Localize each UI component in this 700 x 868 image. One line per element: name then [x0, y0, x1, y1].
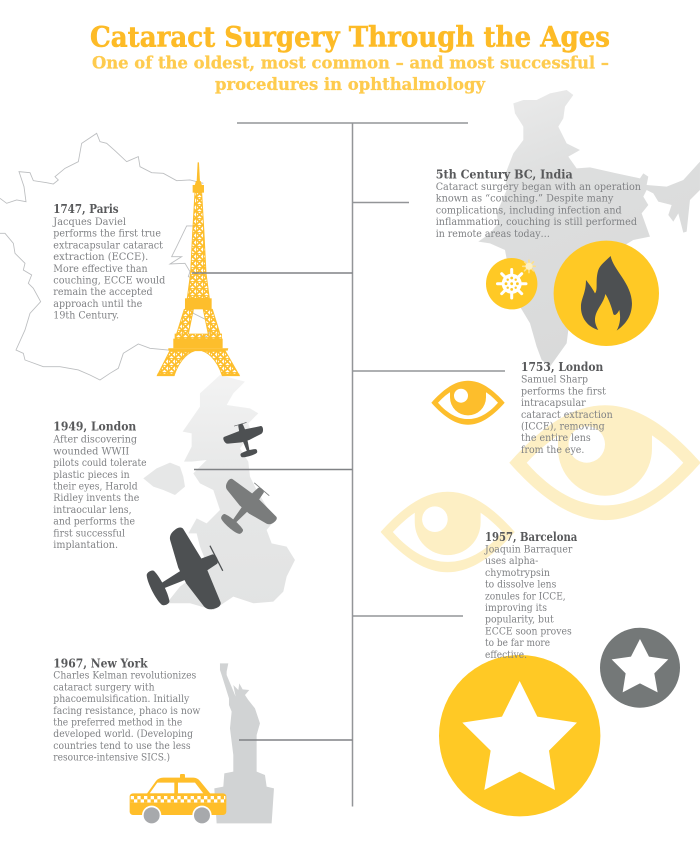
text: 1753, London: from the eye. — [521, 444, 584, 456]
text: 1753, London: intracapsular — [521, 397, 586, 409]
text: 5th Century BC, India: 5th Century BC, India — [436, 167, 573, 181]
text: 1957, Barcelona: popularity, but — [485, 614, 554, 626]
text: 1753, London: Samuel Sharp — [521, 374, 588, 386]
text: 1747, Paris: More effective than — [53, 263, 148, 275]
text: 1753, London: performs the first — [521, 385, 607, 397]
text: 1957, Barcelona: zonules for ICCE, — [485, 590, 566, 602]
text: 5th Century BC, India: inflammation, couching is still performed — [436, 216, 637, 228]
text: 1967, New York: 1967, New York — [53, 656, 148, 670]
text: 1949, London: their eyes, Harold — [53, 480, 138, 492]
icon: large circle with star — [439, 655, 600, 816]
text: 1949, London: plastic pieces in — [53, 469, 130, 481]
icon: medium pale eye — [381, 492, 515, 572]
icon: yellow taxi — [130, 774, 226, 825]
icon: large circle with flame — [554, 241, 659, 346]
text: 1949, London: wounded WWII — [53, 445, 129, 457]
text: 1753, London: (ICCE), removing — [521, 420, 605, 432]
icon: Eiffel Tower — [157, 162, 239, 376]
text: 1957, Barcelona: 1957, Barcelona — [485, 530, 578, 544]
text: 1957, Barcelona: Joaquin Barraquer — [484, 544, 572, 556]
text: 1747, Paris: Jacques Daviel — [52, 216, 127, 228]
subtitle — [92, 53, 609, 95]
text: 1967, New York: developed world. (Developing — [53, 728, 193, 740]
text: 5th Century BC, India: in remote areas today… — [436, 228, 550, 240]
text: 1949, London: first successful — [53, 527, 126, 539]
text: 1967, New York: resource-intensive SICS.) — [53, 752, 170, 764]
text: 1957, Barcelona: effective. — [485, 649, 527, 661]
text: 1949, London: implantation. — [53, 539, 118, 551]
text: 1949, London: and performs the — [53, 516, 135, 528]
text: 1949, London: 1949, London — [53, 420, 137, 434]
icon: three fighter planes — [132, 418, 286, 631]
text: 1747, Paris: extraction (ECCE). — [53, 251, 148, 263]
text: 1747, Paris: 19th Century. — [53, 310, 119, 322]
text: 1949, London — [52, 420, 147, 551]
map: United Kingdom — [143, 375, 295, 610]
text: 5th Century BC, India: Cataract surgery began with an operation — [436, 181, 641, 193]
timeline — [192, 123, 505, 806]
text: 1967, New York — [53, 656, 200, 764]
title: Cataract Surgery Through the Ages — [90, 21, 610, 54]
text: 1967, New York: facing resistance, phaco is now — [53, 705, 200, 717]
text: 1957, Barcelona: to be far more — [485, 637, 550, 649]
text: 1753, London: the entire lens — [521, 432, 591, 444]
text: 1957, Barcelona: uses alpha- — [485, 555, 539, 567]
text: 1967, New York: cataract surgery with — [53, 681, 155, 693]
text: 1949, London: intraocular lens, — [53, 504, 132, 516]
text: 1753, London — [521, 360, 613, 456]
text: 1967, New York: countries tend to use the less — [53, 740, 191, 752]
text: 1747, Paris: approach until the — [53, 298, 142, 310]
text: 1747, Paris: performs the first true — [53, 228, 161, 240]
text: 1967, New York: phacoemulsification. Initially — [53, 693, 189, 705]
text: 1967, New York: Charles Kelman revolutionizes — [53, 670, 196, 682]
text: 1957, Barcelona — [484, 530, 578, 661]
text: 1747, Paris: remain the accepted — [53, 286, 153, 298]
text: 1957, Barcelona: ECCE soon proves — [485, 625, 572, 637]
text: 1747, Paris: couching, ECCE would — [53, 274, 166, 286]
subtitle: One of the oldest, most common – and most successful – — [92, 53, 609, 73]
text: 5th Century BC, India: known as “couching.” Despite many — [436, 193, 614, 205]
text: 1949, London: pilots could tolerate — [53, 457, 147, 469]
icon: large pale eye — [509, 405, 700, 520]
text: 1747, Paris — [52, 202, 166, 322]
text: 1747, Paris: 1747, Paris — [53, 202, 119, 216]
map: France outline — [0, 133, 213, 380]
text: 1949, London: After discovering — [52, 434, 137, 446]
icon: small circle with virus — [486, 258, 537, 309]
text: 1967, New York: the preferred method in the — [53, 716, 182, 728]
icon: grey circle with star — [600, 628, 680, 708]
map: India — [478, 90, 700, 367]
text: 1949, London: Ridley invents the — [53, 492, 139, 504]
text: 1753, London: 1753, London — [521, 360, 604, 374]
text: 1957, Barcelona: to dissolve lens — [485, 579, 556, 591]
text: 1957, Barcelona: chymotrypsin — [485, 567, 550, 579]
text: 1747, Paris: extracapsular cataract — [53, 239, 164, 251]
icon: yellow eye — [431, 381, 505, 425]
text: 1957, Barcelona: improving its — [485, 602, 547, 614]
subtitle: procedures in ophthalmology — [215, 75, 486, 95]
text: 1753, London: cataract extraction — [521, 409, 613, 421]
icon: Statue of Liberty — [214, 663, 274, 823]
text: 5th Century BC, India — [436, 167, 641, 240]
text: 5th Century BC, India: complications, including infection and — [436, 204, 622, 216]
